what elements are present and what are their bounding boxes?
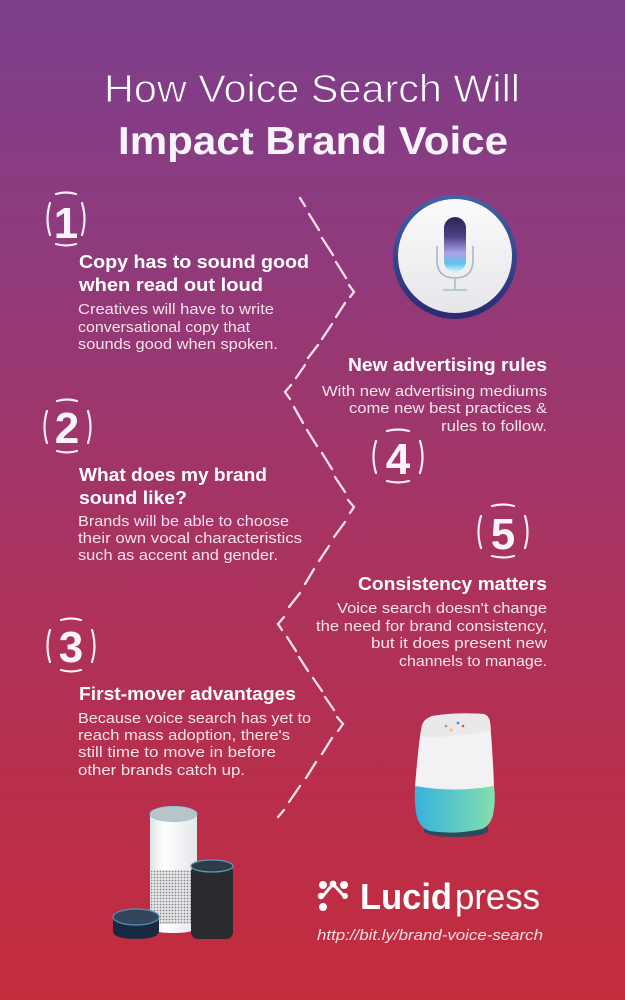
title [104, 68, 520, 163]
title: How Voice Search Will [104, 68, 520, 111]
text block 1: sounds good when spoken. [78, 336, 278, 353]
text block 3 [78, 684, 311, 779]
number badge 2 [44, 400, 90, 453]
logo: lucidpress: press [455, 876, 540, 917]
icon: amazon echo speakers [113, 806, 233, 939]
number badge 1: 1 [54, 199, 78, 248]
text block 1: conversational copy that [78, 319, 251, 336]
logo: lucidpress: Lucid [360, 876, 452, 917]
number badge 4 [374, 430, 422, 484]
text block 4: With new advertising mediums [322, 383, 547, 400]
text block 5: but it does present new [371, 635, 547, 652]
text block 4: rules to follow. [441, 418, 547, 435]
text block 2 [78, 465, 302, 564]
text block 3: reach mass adoption, there's [78, 727, 290, 744]
number badge 1 [48, 192, 84, 248]
text block 5: the need for brand consistency, [316, 618, 547, 635]
text block 2: Brands will be able to choose [78, 513, 289, 530]
number badge 5: 5 [491, 510, 515, 559]
number badge 2: 2 [55, 404, 79, 453]
text block 4: New advertising rules [348, 355, 547, 375]
text block 3: Because voice search has yet to [78, 710, 311, 727]
text block 2: such as accent and gender. [78, 547, 278, 564]
number badge 3 [48, 618, 94, 672]
dashed zig-zag divider [278, 198, 354, 817]
text block 3: still time to move in before [78, 744, 276, 761]
icon: google home speaker [415, 713, 495, 837]
text block 1: when read out loud [78, 275, 263, 295]
number badge 3: 3 [59, 623, 83, 672]
text block 5: Consistency matters [358, 574, 547, 594]
text block 4: come new best practices & [349, 400, 547, 417]
text block 5: channels to manage. [399, 653, 547, 670]
logo: lucidpress [318, 876, 540, 917]
text block 5: Voice search doesn't change [337, 600, 547, 617]
icon: siri microphone [393, 195, 517, 319]
text block 3: other brands catch up. [78, 762, 245, 779]
text block 3: First-mover advantages [79, 684, 296, 704]
text block 1: Creatives will have to write [78, 301, 274, 318]
url link: http://bit.ly/brand-voice-search [317, 927, 543, 944]
number badge 5 [478, 504, 528, 559]
text block 2: their own vocal characteristics [78, 530, 302, 547]
text block 2: What does my brand [79, 465, 267, 485]
number badge 4: 4 [386, 435, 411, 484]
text block 5 [316, 574, 547, 670]
text block 4 [322, 355, 547, 435]
text block 1 [78, 252, 309, 353]
text block 2: sound like? [79, 488, 187, 508]
title: Impact Brand Voice [118, 120, 508, 163]
text block 1: Copy has to sound good [79, 252, 309, 272]
